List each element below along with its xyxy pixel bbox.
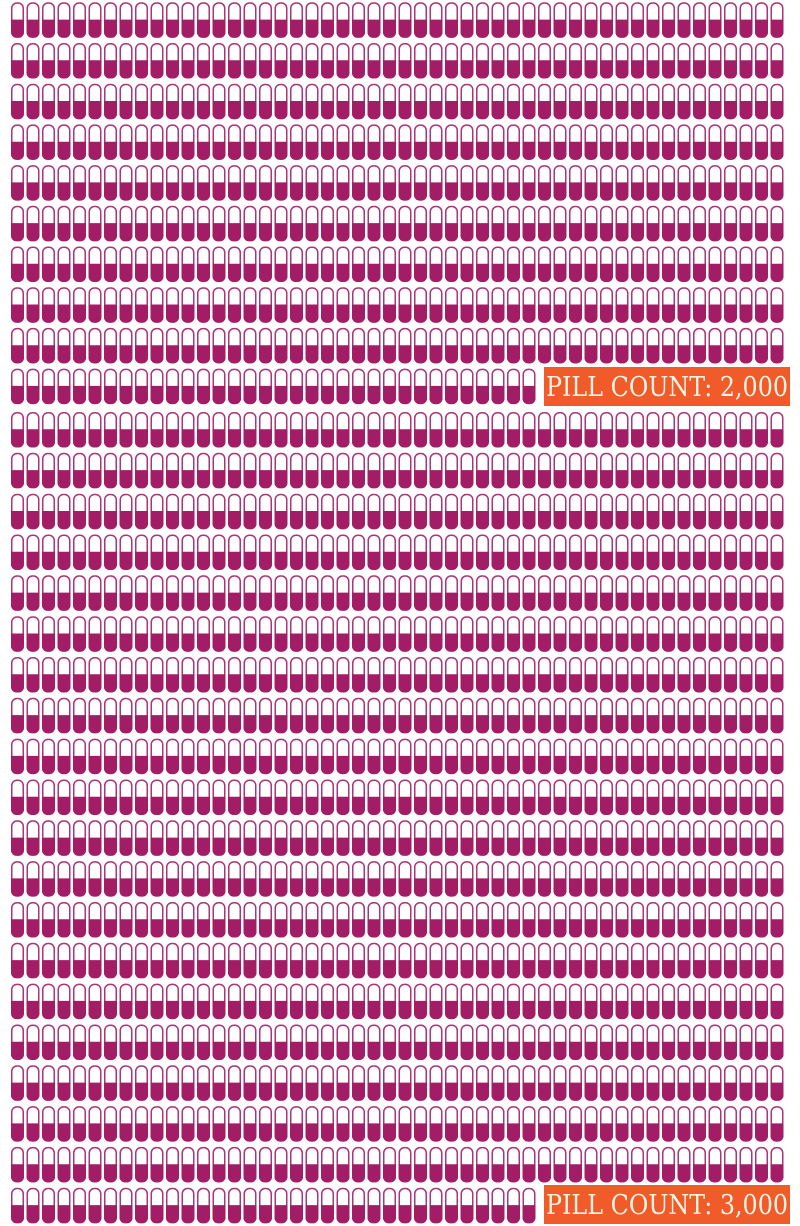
pill grid: next 3,000 pills — [11, 413, 784, 1223]
pill grid: first 2,000 pills — [11, 3, 784, 404]
